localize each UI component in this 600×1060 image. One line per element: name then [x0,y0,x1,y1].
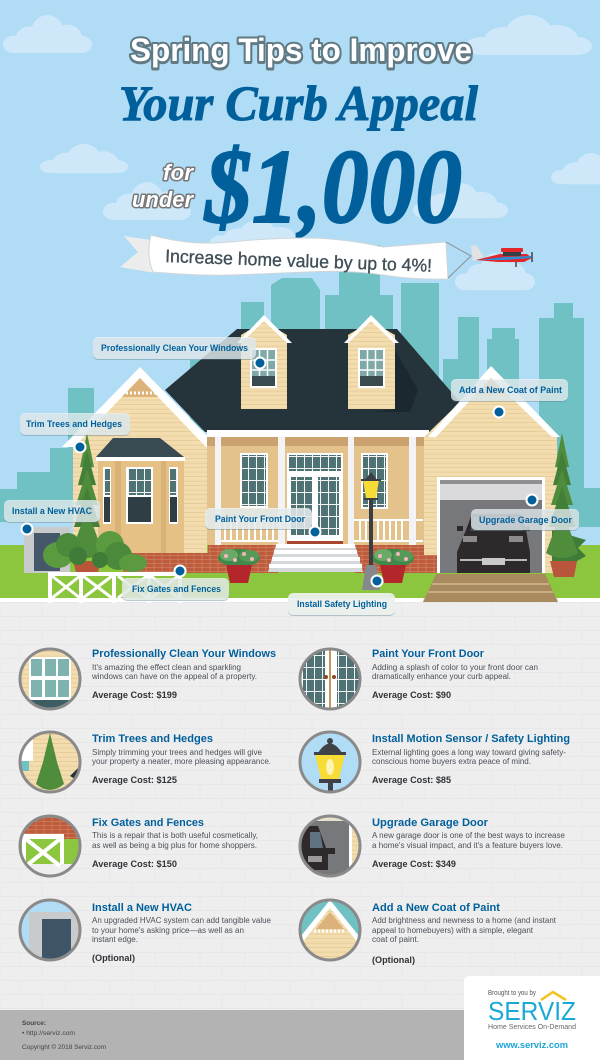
location markers [22,358,538,586]
tip: Professionally Clean Your Windows [19,648,276,710]
label: Professionally Clean Your Windows [93,337,256,360]
label: Upgrade Garage Door [471,509,579,531]
heading: Install Motion Sensor / Safety Lighting [372,733,570,745]
driveway [423,574,558,602]
porch [207,430,429,545]
label: Professionally Clean Your Windows: Professionally Clean Your Windows [101,343,248,353]
porch left window [240,453,268,508]
for: for [163,160,194,185]
heading: Add a New Coat of Paint [372,902,500,914]
description: Simply trimming your trees and hedges will give [92,748,262,757]
description: An upgraded HVAC system can add tangible value [92,916,271,925]
front door [287,453,343,545]
lawn [0,545,600,600]
heading: Trim Trees and Hedges [92,733,213,745]
air conditioner [24,527,70,573]
description: Adding a splash of color to your front door can [372,663,538,672]
heading: Paint Your Front Door [372,648,485,660]
footer [0,1010,600,1060]
white fence [48,572,182,603]
heading: Upgrade Garage Door [372,817,489,829]
porch right window [361,453,388,509]
garage door [437,477,545,573]
label: Paint Your Front Door [205,508,312,530]
description: Add brightness and newness to a home (and instant [372,916,557,925]
right tree [546,433,586,577]
tagline: Home Services On-Demand [488,1022,576,1031]
website: www.serviz.com [495,1040,568,1051]
sidewalk and brick wall [0,598,600,1010]
copyright: Copyright © 2018 Serviz.com [22,1043,106,1051]
label: Add a New Coat of Paint [451,379,568,402]
description: instant edge. [92,935,138,944]
icon: window [19,648,81,710]
left dormer [237,315,292,409]
sky background [0,0,600,600]
description: A new garage door is one of the best ways to increase [372,831,565,840]
tip: Install a New HVAC [19,899,271,963]
left gable wall [62,367,218,553]
icon: tree [19,731,81,793]
cost: Average Cost: $349 [372,859,456,869]
icon: door [299,648,361,710]
label: Trim Trees and Hedges: Trim Trees and Hedges [26,419,122,429]
tip: Upgrade Garage Door [299,815,565,877]
description [372,831,565,850]
description: dramatically enhance your curb appeal. [372,672,511,681]
label: Fix Gates and Fences: Fix Gates and Fences [132,584,221,594]
icon: fence [19,815,81,877]
clouds [3,15,600,290]
banner text: Increase home value by up to 4%! [165,246,432,276]
sponsor logo panel [464,976,600,1060]
right dormer [344,315,399,409]
porch columns [215,437,416,545]
cost: Average Cost: $125 [92,775,177,785]
left bushes [43,531,147,572]
sources [22,1020,75,1037]
car [457,514,530,573]
icon: hvac [19,899,81,961]
description: coat of paint. [372,935,419,944]
label: Install a New HVAC [4,500,100,523]
banner [120,235,471,279]
sources: Source: [22,1020,46,1027]
tip: Install Motion Sensor / Safety Lighting [299,731,570,793]
description: conscious home buyers extra peace of mind. [372,757,531,766]
description [372,916,557,944]
icon: airplane [471,245,532,267]
tip: Add a New Coat of Paint [299,899,557,965]
description: It's amazing the effect clean and sparkling [92,663,241,672]
brought to you by: Brought to you by [488,990,536,997]
sources: • http://serviz.com [22,1030,75,1037]
cost: Average Cost: $150 [92,859,177,869]
description: your property a neater, more pleasing appearance. [92,757,271,766]
garage [424,366,560,573]
description [92,916,271,944]
description: as well as being a big plus for home shoppers. [92,841,257,850]
label: Install Safety Lighting: Install Safety Lighting [297,599,387,609]
description: This is a repair that is both useful cosmetically, [92,831,258,840]
flower pot left [218,549,260,583]
label: Install Safety Lighting [288,593,395,616]
heading: Install a New HVAC [92,902,192,914]
icon: garage car [299,815,361,877]
icon: lamp [299,731,361,793]
label: Upgrade Garage Door: Upgrade Garage Door [479,515,573,525]
headline line 1: Spring Tips to Improve [130,32,472,68]
bay window [96,438,185,553]
tip: Fix Gates and Fences [19,815,258,877]
label: Paint Your Front Door: Paint Your Front Door [215,514,306,524]
house [0,315,600,1060]
porch railing [220,520,423,541]
heading: Fix Gates and Fences [92,817,204,829]
description [372,663,538,681]
cost: Average Cost: $85 [372,775,451,785]
title [119,32,478,245]
cost: Average Cost: $90 [372,690,451,700]
logo wordmark: SERVIZ [488,996,576,1026]
note: (Optional) [92,953,135,963]
description [92,748,271,766]
label: Install a New HVAC: Install a New HVAC [12,506,93,516]
description: External lighting goes a long way toward giving safety- [372,748,566,757]
left tree [71,433,103,576]
description [92,831,258,850]
description: a home's visual impact, and it's a feature buyers love. [372,841,563,850]
main roof [165,329,460,432]
label: Trim Trees and Hedges [20,413,130,436]
description: to your home's asking price—as well as an [92,926,244,935]
heading: Professionally Clean Your Windows [92,648,276,660]
label: Add a New Coat of Paint: Add a New Coat of Paint [459,385,562,395]
flower pot right [372,549,414,583]
tip: Paint Your Front Door [299,648,538,710]
description [91,663,257,681]
tip: Trim Trees and Hedges [19,731,271,793]
front steps [268,545,363,572]
icon: gable [299,899,361,961]
price: $1,000 [203,128,462,245]
label: Fix Gates and Fences [122,578,229,601]
description: windows can have on the appeal of a property. [91,672,257,681]
under: under [132,187,194,212]
description [372,748,566,766]
headline line 2: Your Curb Appeal [119,75,478,131]
cost: Average Cost: $199 [92,690,177,700]
description: appeal to homebuyers) with a simple, elegant [372,926,534,935]
brick foundation [123,545,424,573]
note: (Optional) [372,955,415,965]
city skyline [0,245,600,527]
safety lamp [361,472,381,590]
icon: roof [541,992,566,1000]
